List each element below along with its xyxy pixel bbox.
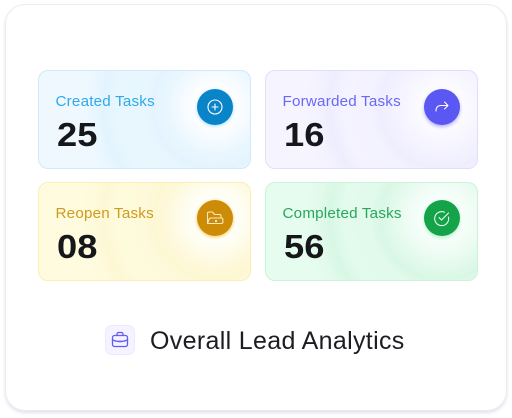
value: 25 xyxy=(56,116,97,153)
label: Reopen Tasks xyxy=(56,205,154,222)
label: Created Tasks xyxy=(56,93,155,110)
panel: completed tasks xyxy=(264,182,478,281)
icon: check circle xyxy=(424,200,460,236)
icon: forward arrow xyxy=(424,89,460,125)
title: Overall Lead Analytics xyxy=(150,327,405,355)
value: 08 xyxy=(56,228,97,265)
panel: created tasks xyxy=(38,70,250,169)
value: 16 xyxy=(284,116,324,153)
panel: reopen tasks xyxy=(38,182,250,281)
icon: briefcase xyxy=(105,325,135,355)
label: Forwarded Tasks xyxy=(282,93,401,110)
icon: plus circle xyxy=(196,89,232,125)
icon: folder xyxy=(196,200,232,236)
label: Completed Tasks xyxy=(282,205,402,222)
value: 56 xyxy=(284,228,324,265)
panel: forwarded tasks xyxy=(264,70,478,169)
